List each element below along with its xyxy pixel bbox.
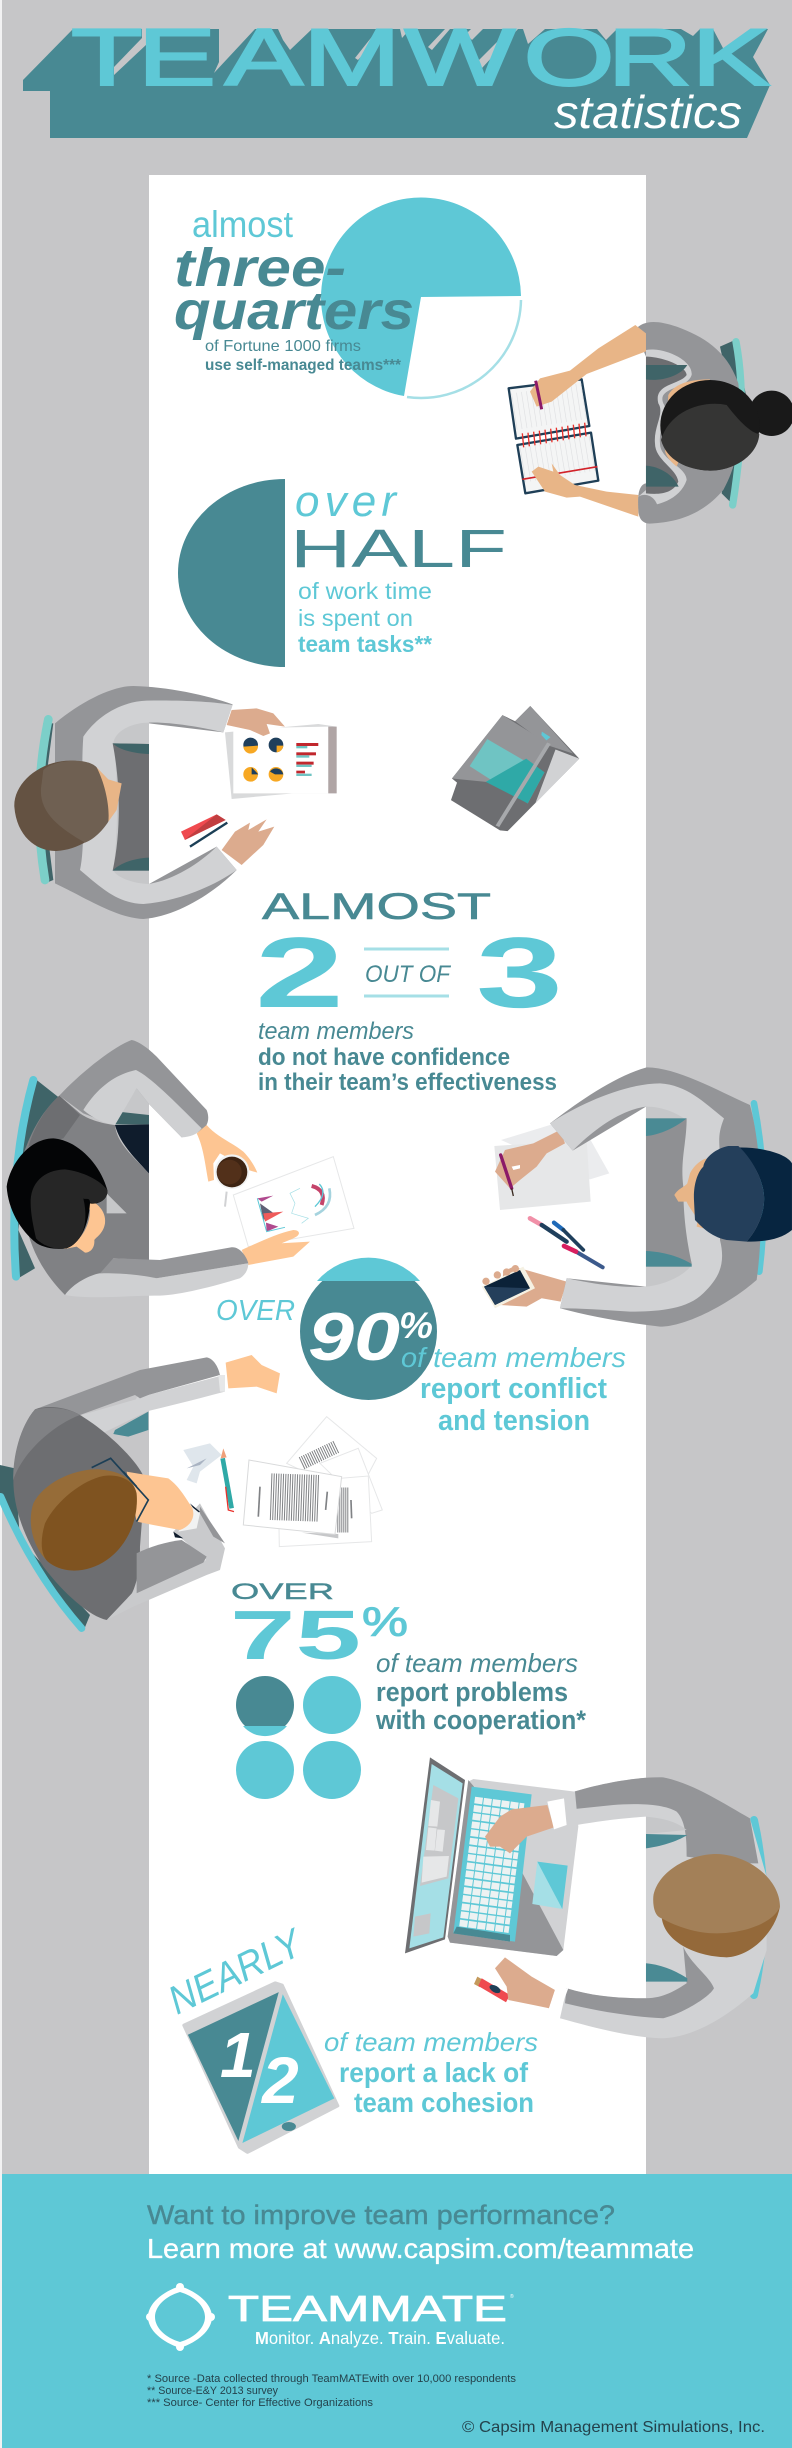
stat: almost three-quarters: quarters	[174, 281, 414, 341]
head with bun	[660, 379, 792, 471]
call to action	[147, 2200, 694, 2264]
stat: almost 2 out of 3: team members	[258, 1018, 414, 1045]
stapler and pen	[181, 814, 227, 847]
stat: nearly 1 of 2	[162, 1920, 538, 2118]
call to action: Want to improve team performance?	[147, 2200, 615, 2230]
stat: almost 2 out of 3: ALMOST	[262, 886, 491, 927]
figure: person with coffee, left	[7, 1040, 354, 1297]
stat: over 90%: of team members	[401, 1342, 626, 1373]
stat: over 90%: %	[399, 1305, 433, 1346]
icon: tablet with 1/2	[184, 1983, 337, 2152]
hand on keyboard	[485, 1798, 567, 1853]
papers and pen	[494, 1125, 609, 1210]
logo: teammate: Monitor. Analyze. Train. Evaluate.	[255, 2328, 505, 2348]
pie chart: three quarters	[321, 197, 521, 398]
papers	[243, 1417, 382, 1547]
notebook	[509, 379, 598, 493]
hand with phone	[482, 1265, 567, 1308]
stat: over 75%: 75	[230, 1596, 361, 1674]
figure: person with glasses and papers, left	[0, 1355, 382, 1628]
chart paper	[233, 1157, 354, 1247]
lower arm	[107, 1503, 225, 1620]
stat: over 90%: report conflict	[420, 1373, 607, 1405]
sources: *** Source- Center for Effective Organizations	[147, 2397, 373, 2409]
pencil	[221, 1448, 234, 1512]
stat: over half: over	[295, 477, 398, 526]
stat: over half	[290, 477, 507, 657]
arm: lower, on notebook	[532, 463, 638, 517]
body	[550, 1067, 761, 1327]
lower sleeve	[65, 1247, 248, 1297]
stat: nearly 1 of 2: team cohesion	[354, 2087, 534, 2118]
stat: almost three-quarters: three-	[174, 238, 346, 298]
head	[674, 1146, 792, 1242]
stat: over half: is spent on	[298, 605, 413, 631]
top arm	[35, 1355, 280, 1436]
figure: person with notebook, top right	[509, 322, 792, 524]
markers	[530, 1218, 603, 1267]
arm: upper, holding pen	[530, 325, 646, 407]
laptop	[405, 1757, 578, 1956]
panel: footer	[2, 2174, 792, 2448]
teal seat	[113, 1412, 148, 1437]
logo: teammate: TEAMMATE	[228, 2288, 507, 2329]
stat: almost three-quarters: use self-managed teams***	[205, 357, 402, 374]
hand: lower	[222, 819, 274, 865]
hand: top	[227, 708, 285, 736]
stat: nearly 1 of 2: report a lack of	[339, 2057, 529, 2088]
stat: almost 2 out of 3: 3	[476, 917, 563, 1029]
sources: ** Source-E&Y 2013 survey	[147, 2385, 278, 2397]
stat: nearly 1 of 2: 1	[220, 2019, 256, 2091]
stat: nearly 1 of 2: 2	[260, 2043, 299, 2117]
stat: nearly 1 of 2: of team members	[324, 2027, 538, 2057]
title banner	[23, 13, 770, 138]
stat: almost 2 out of 3: do not have confidence	[258, 1044, 510, 1071]
sources	[147, 2373, 517, 2409]
stat: almost 2 out of 3	[255, 886, 563, 1096]
lower hand	[242, 1230, 310, 1265]
stat: over 75%: %	[362, 1599, 408, 1645]
torso	[13, 1407, 145, 1620]
body	[560, 1777, 767, 2038]
chart: four circles, 75 percent	[236, 1676, 361, 1799]
stat: over 75%	[230, 1579, 586, 1735]
stat: almost 2 out of 3: OUT OF	[365, 961, 451, 988]
stat: almost three-quarters: almost	[192, 204, 294, 245]
stat: over half: team tasks**	[298, 631, 432, 657]
title: TEAMWORK: TEAMWORK	[71, 13, 770, 103]
copyright: © Capsim Management Simulations, Inc.	[462, 2419, 765, 2436]
stat: almost 2 out of 3: in their team’s effectiveness	[258, 1069, 557, 1096]
figure: person with charts, left	[14, 686, 337, 919]
sources: * Source -Data collected through TeamMATEwith over 10,000 respondents	[147, 2373, 517, 2385]
stat: almost three-quarters	[174, 204, 414, 374]
half circle chart	[178, 479, 285, 667]
hand with coffee cup	[197, 1125, 257, 1207]
figure: person with laptop, right	[405, 1757, 780, 2038]
stat: over 90%	[216, 1295, 626, 1437]
stat: over half: HALF	[290, 519, 507, 579]
stat: almost three-quarters: of Fortune 1000 firms	[205, 338, 361, 355]
chart: 90 percent circle	[300, 1258, 437, 1400]
stat: over 75%: with cooperation*	[375, 1705, 586, 1735]
stat: nearly 1 of 2: NEARLY	[162, 1920, 311, 2023]
call to action: Learn more at www.capsim.com/teammate	[147, 2233, 694, 2264]
stat: over 75%: OVER	[231, 1579, 334, 1604]
stat: over 75%: report problems	[376, 1677, 568, 1707]
head	[14, 761, 122, 851]
head	[653, 1854, 780, 1957]
chart papers	[225, 724, 337, 799]
crumpled paper	[183, 1443, 222, 1483]
stat: over 90%: 90	[308, 1299, 400, 1375]
panel: white table	[149, 175, 646, 2175]
stat: over 90%: and tension	[438, 1405, 590, 1437]
sleeve cuffs	[638, 495, 658, 524]
stat: almost 2 out of 3: 2	[255, 917, 344, 1029]
subtitle: statistics: statistics	[554, 86, 742, 138]
stat: over 75%: of team members	[376, 1648, 578, 1678]
icon: notebook on table	[451, 706, 579, 831]
stat: over half: of work time	[298, 578, 432, 604]
figure: person writing with phone, right	[482, 1067, 792, 1327]
upper sleeve	[59, 1040, 208, 1137]
stat: over 90%: OVER	[216, 1295, 295, 1327]
head	[7, 1138, 107, 1253]
head and hand	[31, 1458, 193, 1571]
logo: teammate: ®	[510, 2293, 514, 2300]
hand with USB drive	[474, 1957, 568, 2015]
logo: teammate	[146, 2283, 514, 2351]
